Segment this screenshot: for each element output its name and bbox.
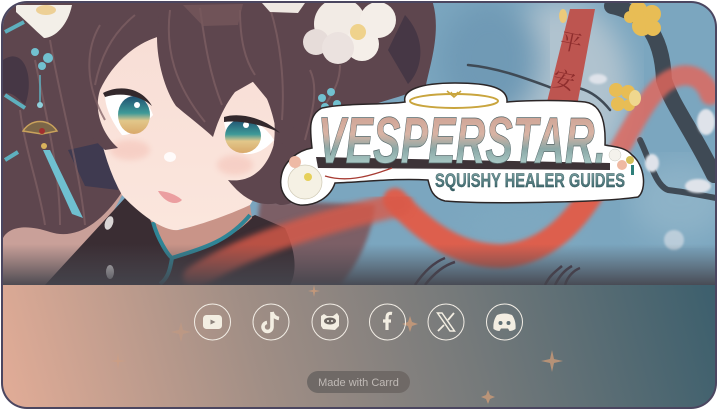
cheek blush bbox=[110, 140, 253, 175]
halo bbox=[410, 94, 498, 108]
small flowers right bbox=[609, 149, 634, 175]
right eye bbox=[224, 115, 280, 154]
nose bbox=[164, 152, 176, 162]
dark underline bar bbox=[316, 157, 610, 170]
hair highlights bbox=[20, 8, 340, 225]
footer gradient panel bbox=[0, 285, 718, 410]
red ribbon left bbox=[195, 204, 400, 278]
logo sticker bbox=[281, 83, 644, 205]
icon: mascot bbox=[312, 304, 348, 340]
sticker white outline bbox=[281, 83, 644, 205]
dress bbox=[45, 198, 295, 285]
teal hair beads bbox=[31, 48, 341, 111]
mouth bbox=[158, 191, 182, 203]
hanging red tag: 安 bbox=[550, 62, 578, 97]
subtitle text: SQUISHY HEALER GUIDES bbox=[435, 171, 625, 192]
pale blossoms bbox=[589, 74, 715, 250]
hair back bbox=[0, 0, 436, 238]
white flower left bbox=[16, 5, 72, 38]
icon: x bbox=[428, 304, 464, 340]
made with carrd badge: Made with Carrd bbox=[318, 377, 399, 389]
sleeve bbox=[250, 200, 375, 285]
face bbox=[94, 37, 275, 230]
branches bbox=[468, 6, 716, 198]
neck bbox=[150, 205, 252, 258]
hanging red tag: 平 bbox=[557, 24, 585, 59]
red ribbon right bbox=[395, 75, 710, 256]
teal ribbon behind hair bbox=[5, 22, 25, 160]
white peony bbox=[262, 0, 396, 64]
shoulder bbox=[3, 194, 122, 284]
left eye bbox=[103, 88, 153, 135]
back hair dark locks bbox=[68, 140, 118, 190]
fan ornament bbox=[23, 75, 57, 149]
ear tufts bbox=[183, 4, 243, 26]
sparkles bbox=[110, 285, 563, 404]
yellow blossoms bbox=[559, 1, 661, 111]
fringe hair bbox=[94, 37, 276, 204]
teal collar bbox=[153, 215, 250, 284]
social icons bbox=[194, 304, 522, 340]
icon: discord bbox=[486, 304, 522, 340]
dress buttons bbox=[104, 216, 114, 279]
tassel bbox=[43, 150, 83, 218]
made with carrd badge bbox=[307, 371, 410, 393]
sky background bbox=[0, 0, 718, 290]
banner illustration bbox=[0, 0, 718, 290]
icon: youtube bbox=[194, 304, 230, 340]
icon: tiktok bbox=[253, 304, 289, 340]
icon: facebook bbox=[370, 304, 406, 340]
red cord bbox=[325, 168, 392, 179]
peony on sticker bbox=[288, 156, 322, 199]
hanging red tag bbox=[546, 9, 595, 106]
bottom fade bbox=[0, 244, 718, 286]
lower feather silhouettes bbox=[415, 258, 580, 285]
